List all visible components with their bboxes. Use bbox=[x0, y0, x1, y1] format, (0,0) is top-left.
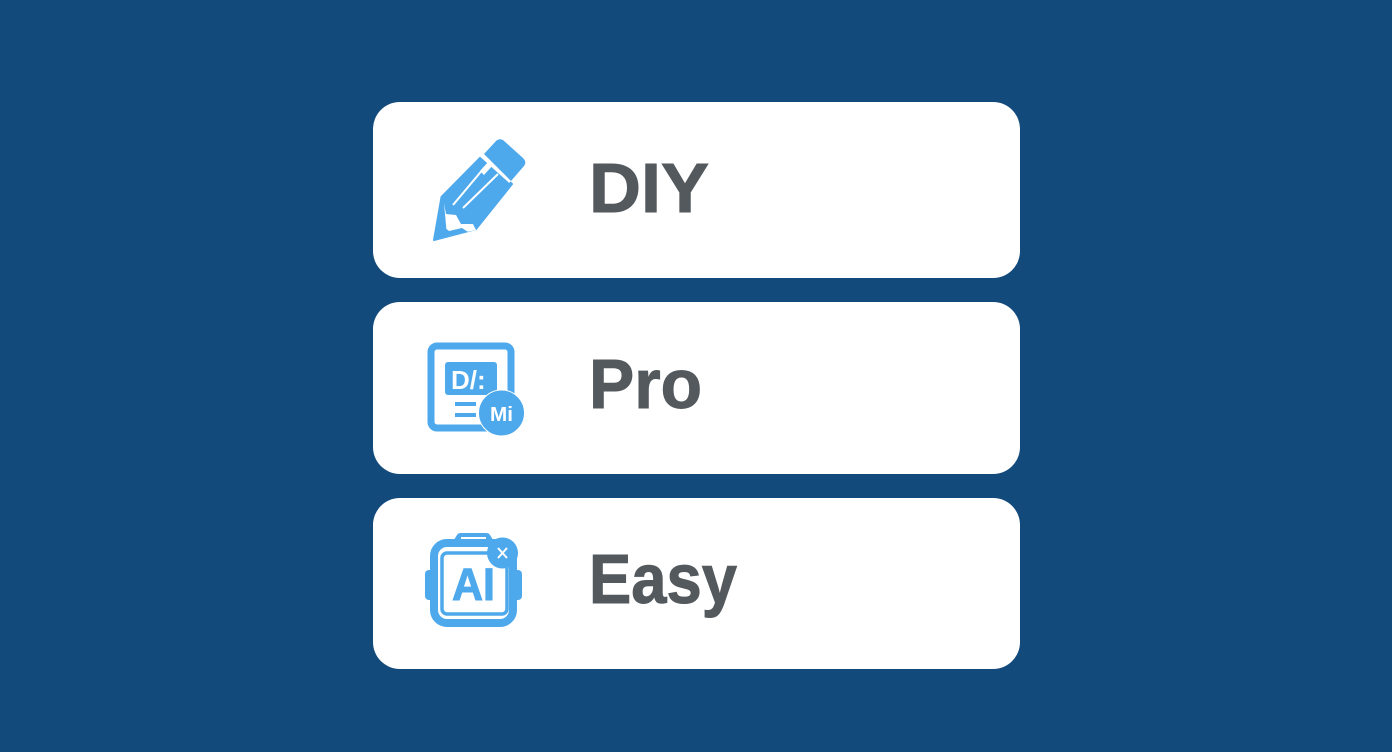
icon: AI chip: AI bbox=[452, 559, 495, 610]
card: DIY bbox=[373, 102, 1020, 278]
icon: document with badge bbox=[431, 346, 524, 436]
icon: document with badge: D/: bbox=[451, 365, 486, 395]
icon: document with badge: Mi bbox=[490, 404, 513, 426]
label: Pro: Pro bbox=[589, 345, 702, 423]
panel: Easy bbox=[373, 498, 1020, 669]
label: Easy: Easy bbox=[589, 540, 737, 618]
icon: pencil bbox=[434, 139, 525, 240]
card: Pro bbox=[373, 302, 1020, 474]
icon: AI chip bbox=[425, 533, 522, 623]
label: DIY: DIY bbox=[589, 149, 709, 227]
panel: DIY bbox=[373, 102, 1020, 278]
card: Easy bbox=[373, 498, 1020, 669]
panel: Pro bbox=[373, 302, 1020, 474]
